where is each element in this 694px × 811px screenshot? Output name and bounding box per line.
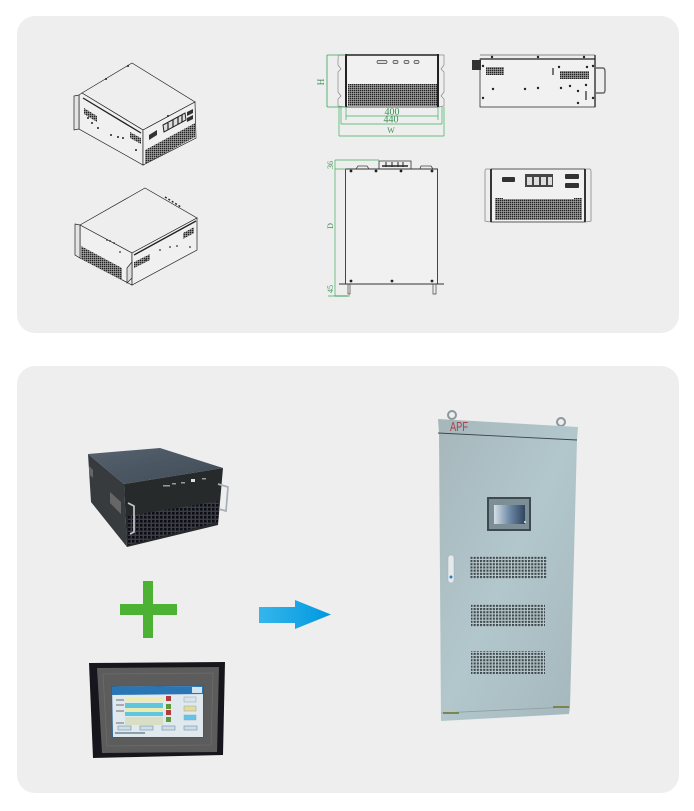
dimension drawing: front view: H <box>316 78 326 85</box>
dimension drawing: front view: 440 <box>384 114 398 126</box>
dimension drawing: top view: D <box>326 223 335 229</box>
door handle <box>448 555 454 583</box>
rear view drawing <box>485 169 591 222</box>
dimension drawing: front view <box>316 54 444 136</box>
isometric drawing: front-side view <box>75 188 197 285</box>
dimension drawing: top view: 45 <box>326 285 335 293</box>
icon: green plus sign <box>120 581 177 638</box>
icon: lifting eyes <box>448 411 565 426</box>
panel: product assembly <box>17 366 679 793</box>
side view drawing <box>472 55 605 107</box>
dimension drawing: front view: W <box>387 126 395 135</box>
photo: touch screen panel <box>89 662 225 758</box>
photo: APF power module <box>88 448 228 547</box>
dimension drawing: top view <box>326 160 444 296</box>
dimension drawing: front view: 400 <box>384 107 400 118</box>
dimension drawing: top view: 36 <box>326 161 335 169</box>
label: APF: APF <box>450 420 468 434</box>
door screen <box>487 497 531 531</box>
photo: assembled APF cabinet <box>438 411 578 721</box>
panel: technical drawings <box>17 16 679 333</box>
ventilation grilles <box>470 556 546 674</box>
isometric drawing: rear-side view <box>74 63 196 165</box>
arrow pointing to cabinet <box>259 600 331 629</box>
